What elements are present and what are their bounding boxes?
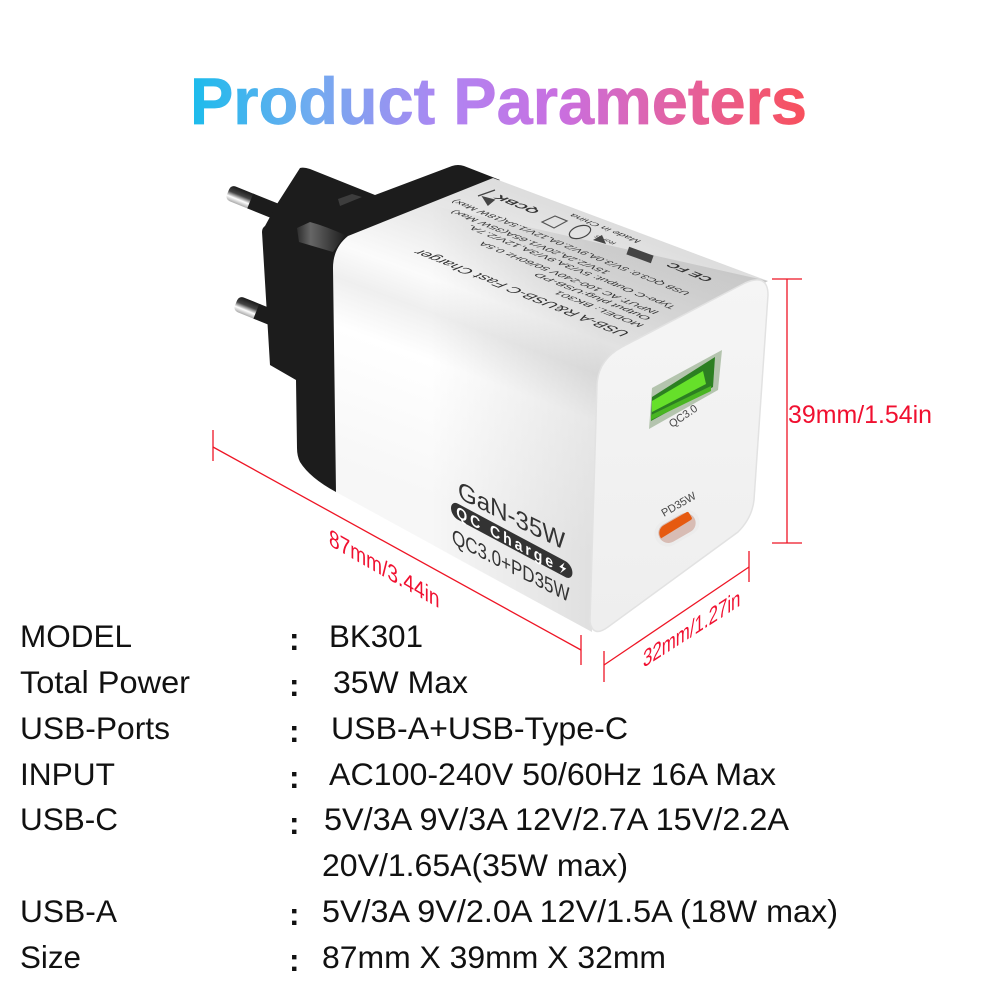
icon: recycle bin mark: [478, 190, 495, 205]
icon: triangle mark: [593, 235, 606, 244]
side print GaN-35W: GaN-35W: [458, 476, 565, 557]
label line type-c: Type-C Output: 5V/3A,9V/3A,12V/2.7A,: [463, 224, 679, 310]
spec row: model: :: [289, 621, 300, 657]
icon: compass mark: [568, 223, 592, 241]
spec row: usb-a: 5V/3A 9V/2.0A 12V/1.5A (18W max): [322, 893, 838, 929]
spec row: usb ports: :: [289, 713, 300, 749]
spec row: total power: Total Power: [20, 664, 190, 700]
label line qc: USB QC3.0: 5V/3.0A,9V/2.0A,12V/1.5A(18W Max): [448, 198, 693, 296]
dimension: length: [213, 430, 581, 665]
spec row: model: BK301: [329, 618, 423, 654]
QC3.0 port caption: QC3.0: [667, 403, 700, 430]
PD35W port caption: PD35W: [660, 490, 699, 520]
side badge QC Charger: [451, 500, 572, 583]
length value: 87mm/3.44in: [329, 524, 439, 614]
label certification marks: CE FC: [662, 261, 716, 283]
label line model: MODEL: BK301: [551, 290, 647, 328]
label made in china: Made in China: [566, 212, 644, 244]
spec row: usb-a: :: [289, 896, 300, 932]
spec row: usb-c: [20, 801, 789, 883]
side print QC3.0+PD35W: QC3.0+PD35W: [452, 525, 570, 607]
spec row: usb ports: [20, 710, 628, 749]
spec row: usb ports: USB-A+USB-Type-C: [331, 710, 628, 746]
label line input: INPUT: AC 100-240V 50/60Hz 0.5A: [475, 240, 662, 315]
label qcbk mark: QCBK: [490, 194, 543, 215]
spec row: input: AC100-240V 50/60Hz 16A Max: [329, 756, 776, 792]
icon: lower plug pin: [233, 296, 287, 330]
depth value: 32mm/1.27in: [643, 584, 740, 674]
title: Product Parameters: [190, 64, 807, 138]
spec row: total power: :: [289, 667, 300, 703]
spec row: total power: [20, 664, 468, 703]
icon: ccc badge: [626, 247, 654, 263]
spec row: size: 87mm X 39mm X 32mm: [322, 939, 666, 975]
icon: certification box: [542, 216, 567, 228]
body shading near front: [430, 205, 768, 632]
white body: [333, 178, 768, 632]
upside-down specification label: [408, 190, 716, 338]
USB-A port: [649, 350, 722, 429]
label line 15v: 15V/2.2A,20V/1.65A(35W Max): [448, 209, 613, 275]
spec row: total power: 35W Max: [333, 664, 468, 700]
front face: [590, 280, 768, 631]
dimension: depth: [604, 551, 749, 682]
spec row: usb-c: USB-C: [20, 801, 118, 837]
black plug base: [262, 165, 500, 492]
spec row: model: MODEL: [20, 618, 132, 654]
spec row: usb-c: 5V/3A 9V/3A 12V/2.7A 15V/2.2A: [324, 801, 789, 837]
black collar highlight: [297, 222, 345, 252]
spec row: size: Size: [20, 939, 81, 975]
spec row: usb-a: USB-A: [20, 893, 117, 929]
spec row: model: [20, 618, 423, 657]
label line output: Output plug:USB-PD: [531, 272, 654, 321]
label rohs mark: RoHS: [592, 234, 619, 245]
spec row: usb ports: USB-Ports: [20, 710, 170, 746]
spec row: input: INPUT: [20, 756, 115, 792]
icon: upper plug pin: [225, 185, 287, 222]
icon: lightning bolt: [559, 560, 566, 577]
USB-C port: [650, 505, 704, 551]
spec row: input: :: [289, 759, 300, 795]
spec row: usb-c: :: [289, 805, 300, 841]
height value: 39mm/1.54in: [788, 401, 932, 429]
spec row: usb-a: [20, 893, 838, 932]
spec row: size: :: [289, 942, 300, 978]
spec row: input: [20, 756, 776, 795]
side badge QC Charger: QC Charge: [456, 504, 553, 573]
spec row: size: [20, 939, 666, 978]
label heading: USB-A R&USB-C Fast Charger: [408, 248, 634, 338]
spec row: usb-c: 20V/1.65A(35W max): [322, 847, 628, 883]
charger product image: [225, 165, 768, 632]
dim recess highlight: [338, 194, 362, 206]
